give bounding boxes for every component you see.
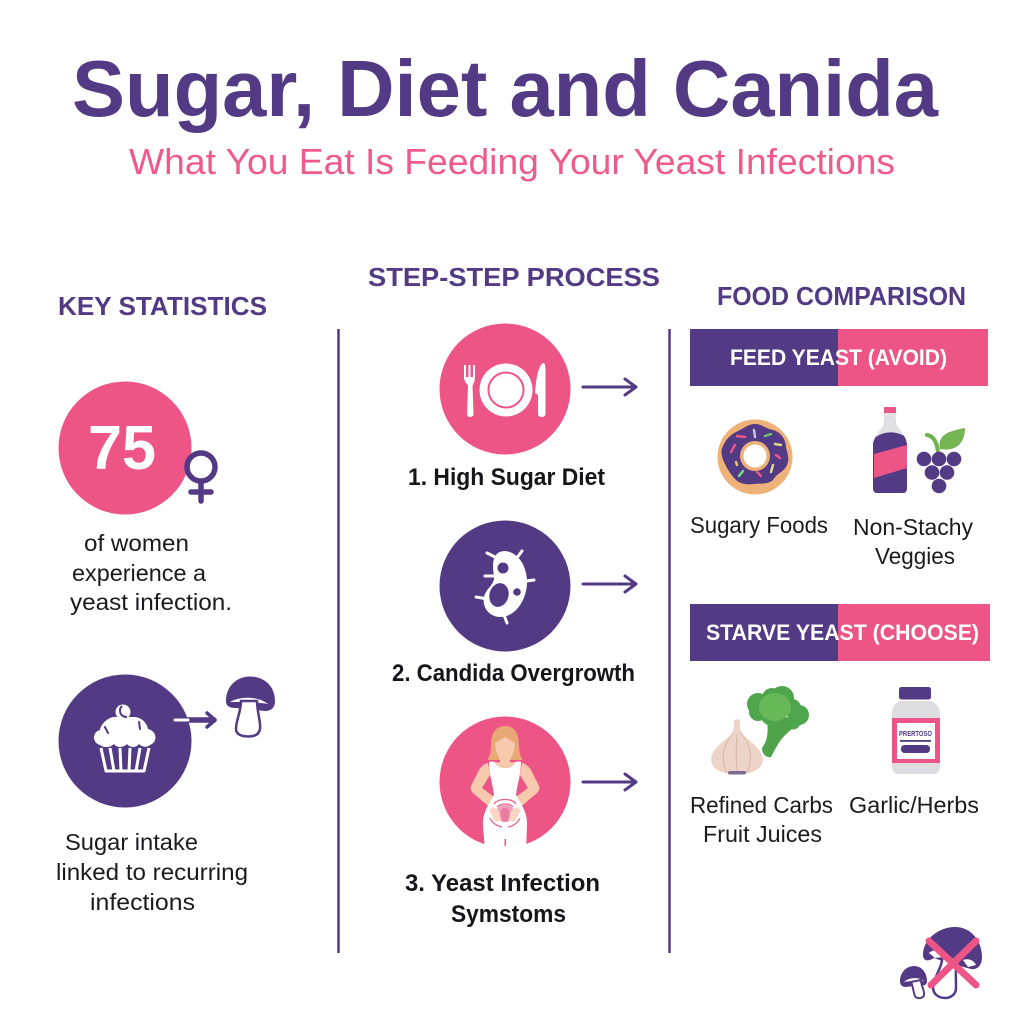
heading: step process: STEP-STEP PROCESS: [368, 262, 660, 292]
banner: starve yeast: [690, 604, 990, 661]
text: sugar intake statistic: [56, 829, 248, 915]
banner: feed yeast: [690, 329, 988, 386]
icon: donut: [718, 420, 792, 494]
label: step 3: Symstoms: [451, 901, 566, 928]
step 1 icon: plate and cutlery: [440, 324, 570, 454]
label: step 1: 1. High Sugar Diet: [408, 464, 605, 491]
text: women statistic: [70, 530, 232, 615]
label: non-starchy veggies: Veggies: [875, 543, 955, 569]
icon: cupcake circle: [58, 674, 192, 808]
icon: female symbol: [187, 453, 215, 501]
banner: feed yeast: FEED YEAST (AVOID): [730, 345, 947, 370]
panel: step-by-step process: [392, 324, 636, 928]
arrow: step 1: [583, 379, 636, 395]
stat: 75 circle: [58, 382, 192, 514]
icon: supplement bottle: PRERTOSO: [899, 731, 932, 738]
icon: crossed-out mushrooms: [900, 927, 982, 998]
label: refined carbs: Fruit Juices: [703, 821, 822, 847]
heading: food comparison: FOOD COMPARISON: [717, 281, 966, 311]
title: Sugar, Diet and Canida: [72, 44, 938, 133]
icon: broccoli: [747, 686, 809, 757]
panel: key statistics: [56, 382, 275, 915]
icon: mushroom: [226, 676, 275, 736]
step 3 icon: woman with abdominal pain: [440, 716, 570, 850]
text: sugar intake statistic: linked to recurring: [56, 859, 248, 885]
label: sugary foods: Sugary Foods: [690, 512, 828, 538]
text: sugar intake statistic: Sugar intake: [65, 829, 198, 855]
text: women statistic: yeast infection.: [70, 589, 232, 615]
icon: grapes: [917, 428, 965, 493]
subtitle: What You Eat Is Feeding Your Yeast Infections: [129, 141, 895, 182]
text: women statistic: experience a: [72, 560, 206, 586]
stat: 75 circle: 75: [88, 414, 156, 483]
label: step 3: [405, 870, 600, 928]
icon: supplement bottle: [892, 687, 940, 774]
text: sugar intake statistic: infections: [90, 889, 195, 915]
icon: garlic: [711, 719, 763, 774]
label: garlic and herbs: Garlic/Herbs: [849, 792, 979, 818]
heading: key statistics: KEY STATISTICS: [58, 291, 267, 321]
label: refined carbs: Refined Carbs: [690, 792, 833, 818]
icon: soda bottle: [873, 407, 907, 493]
label: non-starchy veggies: Non-Stachy: [853, 514, 973, 540]
arrow: sugar to mushroom: [175, 713, 215, 727]
step 2 icon: candida cell: [440, 520, 570, 652]
label: non-starchy veggies: [853, 514, 973, 569]
banner: starve yeast: STARVE YEAST (CHOOSE): [706, 620, 979, 645]
label: step 3: 3. Yeast Infection: [405, 870, 600, 897]
text: women statistic: of women: [84, 530, 189, 556]
label: step 2: 2. Candida Overgrowth: [392, 660, 635, 687]
panel: food comparison: [690, 329, 990, 847]
label: refined carbs: [690, 792, 833, 847]
arrow: step 2: [583, 576, 636, 592]
arrow: step 3: [583, 774, 636, 790]
